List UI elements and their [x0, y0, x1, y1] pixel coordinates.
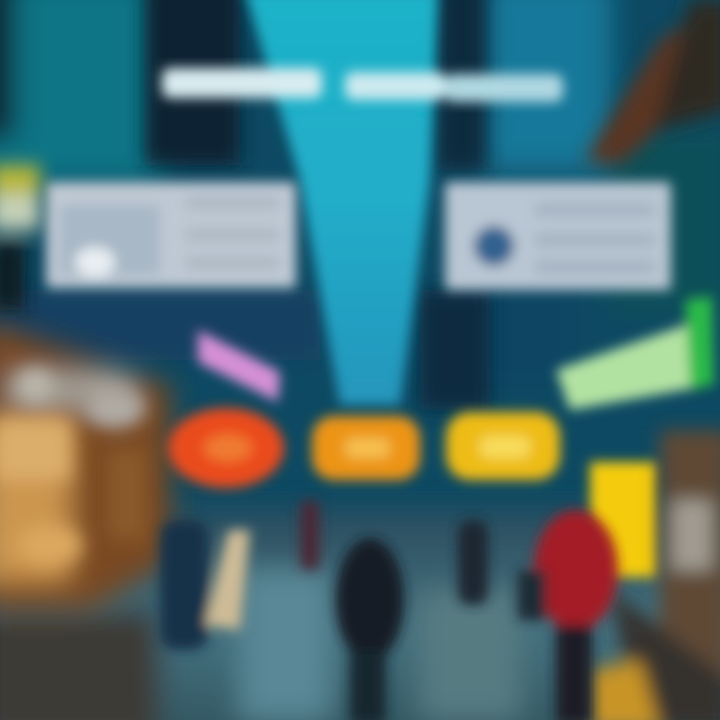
person: left dark	[160, 520, 250, 650]
panel: left white card	[46, 182, 296, 288]
brown left storefront	[0, 320, 170, 610]
right shop	[590, 430, 720, 720]
brown roof beam top right	[585, 0, 720, 165]
central cyan funnel	[245, 0, 438, 405]
yellow sign	[590, 462, 658, 577]
floor	[0, 510, 720, 720]
yellow pill	[446, 412, 560, 480]
title (illegible blurred text)	[162, 68, 563, 102]
dark building columns	[145, 0, 490, 410]
orange-red pill	[168, 408, 284, 488]
orange pill	[312, 416, 420, 480]
person: centre dark	[336, 538, 404, 720]
green banner	[556, 296, 714, 410]
left edge sign	[0, 165, 40, 310]
person: background dark	[300, 500, 488, 605]
person: red jacket	[518, 510, 618, 720]
pink banner	[198, 330, 280, 402]
panel: right white card	[445, 182, 671, 290]
